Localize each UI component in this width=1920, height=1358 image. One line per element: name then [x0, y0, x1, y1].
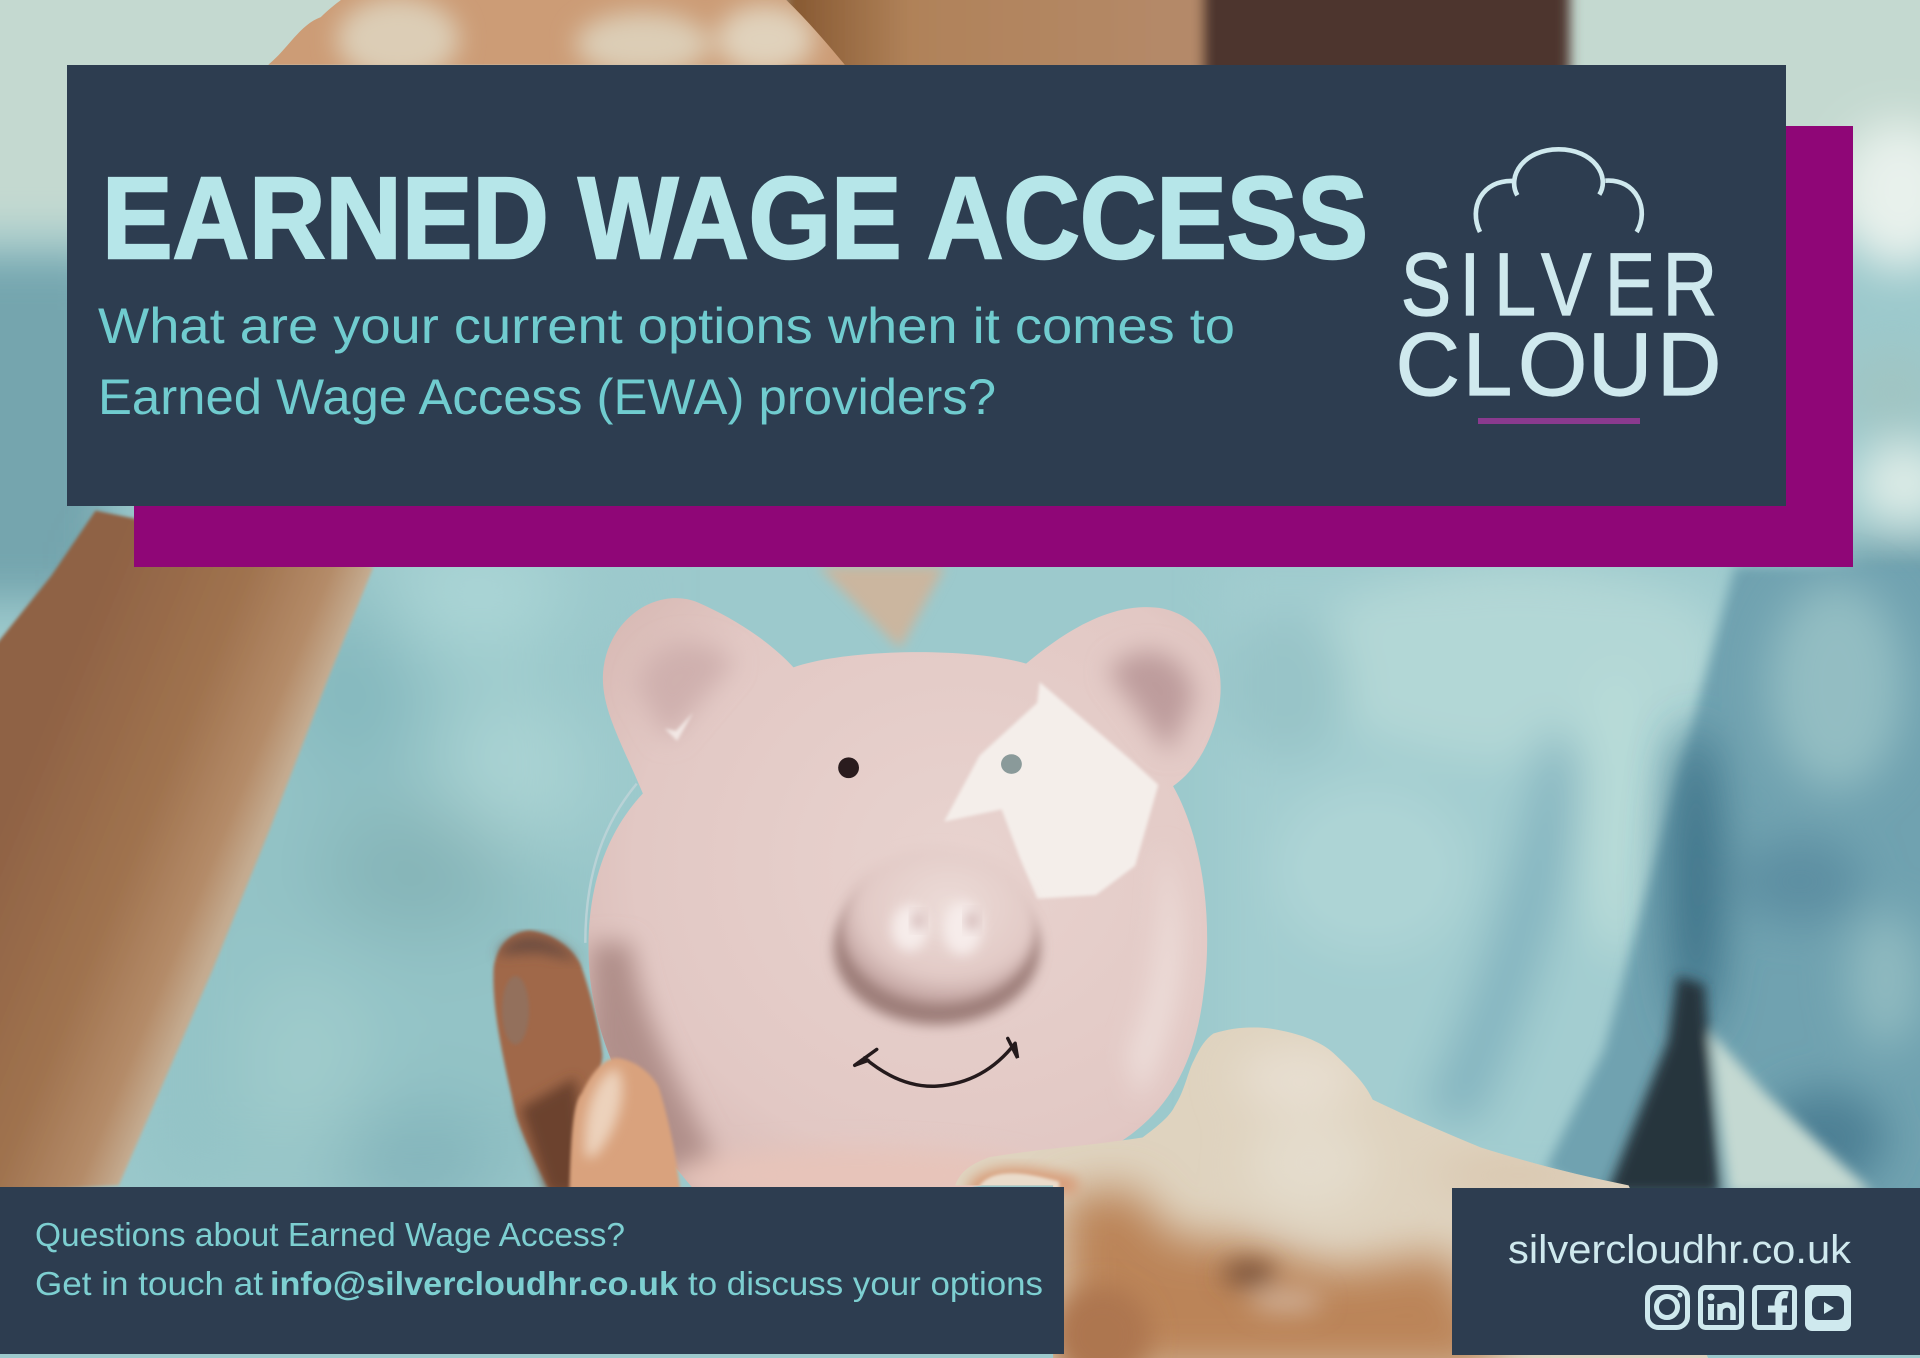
- logo wordmark: [1396, 234, 1721, 414]
- pig left-ear sheen: [666, 715, 692, 740]
- contact text: Questions about Earned Wage Access?: [35, 1216, 625, 1253]
- subtitle: What are your current options when it comes to: [98, 298, 1235, 354]
- header panel: [67, 65, 1786, 506]
- subtitle: Earned Wage Access (EWA) providers?: [98, 369, 996, 425]
- icon: facebook: [1754, 1288, 1794, 1328]
- photo: hand at top: [268, 0, 845, 65]
- logo: Silver Cloud: [1396, 149, 1721, 424]
- pig smile: [855, 1038, 1018, 1086]
- pig white highlight: [944, 682, 1158, 899]
- photo: right hand: [943, 1016, 1727, 1358]
- contact text: [35, 1216, 1043, 1302]
- photo: arm on the left: [0, 511, 373, 1194]
- pig snout: [834, 847, 1040, 1025]
- pig body: [576, 588, 1237, 1202]
- icon: linkedin: [1700, 1288, 1742, 1328]
- icon: youtube: [1805, 1285, 1851, 1331]
- contact text: Get in touch at: [35, 1265, 263, 1302]
- photo: backdrop top and margins: [0, 0, 1920, 618]
- contact text: to discuss your options: [688, 1265, 1043, 1302]
- icon: instagram: [1648, 1288, 1688, 1328]
- pig lower-left shading: [588, 932, 982, 1187]
- photo: shirt gap with light strip and dark wedge: [1607, 976, 1873, 1194]
- pig outer glass reflection: [585, 784, 637, 943]
- photo: shirt folds on right: [1224, 563, 1739, 1194]
- contact text: info@silvercloudhr.co.uk: [270, 1265, 679, 1302]
- purple offset panel: [134, 126, 1853, 567]
- subtitle: [98, 298, 1235, 425]
- website and social panel: [1452, 1188, 1920, 1355]
- photo: shirt folds on left: [135, 551, 600, 1212]
- photo: left hand front finger: [569, 1058, 681, 1194]
- logo wordmark: CLOUD: [1396, 314, 1721, 414]
- photo: dark sleeve on right: [1545, 566, 1920, 1206]
- contact panel: [0, 1187, 1064, 1354]
- icon: cloud: [1476, 149, 1642, 232]
- pig ear shading: [637, 643, 1194, 753]
- photo: neck, hair and V-neck: [784, 0, 1570, 649]
- logo underline: [1478, 418, 1640, 424]
- pig eyes: [838, 754, 1022, 778]
- pig right-edge sheen: [1128, 905, 1180, 1084]
- piggy bank: [576, 588, 1237, 1202]
- title: EARNED WAGE ACCESS: [102, 153, 1368, 283]
- logo wordmark: SILVER: [1401, 234, 1717, 334]
- photo: left hand dark finger: [493, 931, 602, 1194]
- website: silvercloudhr.co.uk: [1508, 1228, 1852, 1272]
